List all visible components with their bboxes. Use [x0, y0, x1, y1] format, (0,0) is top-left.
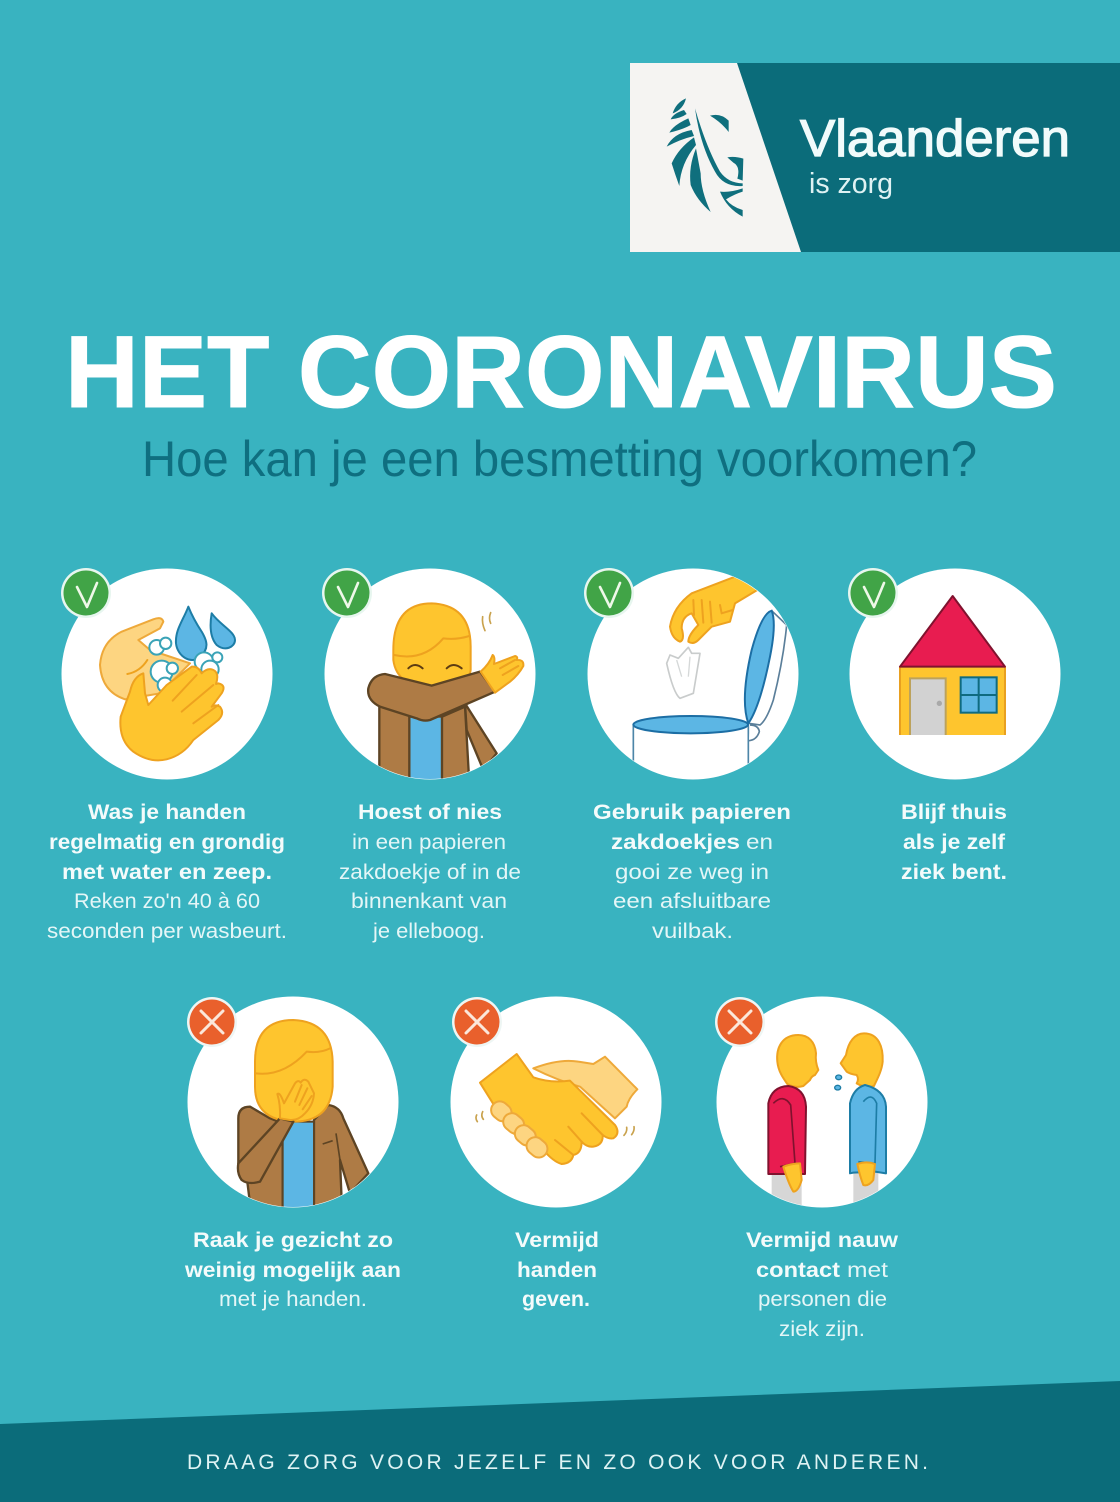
illustration: handshake — [476, 1054, 637, 1164]
panel: paper tissues — [584, 568, 798, 943]
caption — [47, 801, 287, 943]
caption: Gebruik papieren — [593, 801, 791, 824]
illustration: tissue and bin — [633, 577, 787, 787]
panel: stay home — [848, 568, 1060, 884]
caption: in een papieren — [352, 831, 506, 854]
caption: ziek bent. — [901, 861, 1007, 884]
logo tagline: is zorg — [809, 168, 893, 200]
caption: en — [746, 831, 773, 854]
caption: vuilbak. — [652, 920, 733, 943]
title: HET CORONAVIRUS — [65, 315, 1057, 429]
caption: Reken zo'n 40 à 60 — [74, 890, 260, 913]
logo wordmark: Vlaanderen — [800, 110, 1070, 168]
footer banner — [0, 1381, 1120, 1502]
caption: je elleboog. — [372, 920, 485, 943]
circle — [324, 568, 536, 780]
caption: gooi ze weg in — [615, 861, 769, 884]
caption: Hoest of nies — [358, 801, 502, 824]
logo dark banner — [735, 63, 1120, 252]
caption: geven. — [522, 1288, 590, 1311]
badge: check — [584, 568, 634, 618]
caption: regelmatig en grondig — [49, 831, 285, 854]
caption: ziek zijn. — [779, 1318, 865, 1341]
caption: met — [847, 1259, 888, 1282]
panel: cough in elbow — [322, 568, 536, 943]
caption: contact — [756, 1259, 840, 1282]
caption: zakdoekjes — [611, 831, 740, 854]
caption: zakdoekje of in de — [339, 861, 521, 884]
badge: check — [848, 568, 898, 618]
caption — [515, 1229, 599, 1311]
panel: wash hands — [47, 568, 287, 943]
panel: do not touch face — [184, 996, 401, 1311]
caption: met water en zeep. — [62, 861, 272, 884]
caption: Vermijd — [515, 1229, 599, 1252]
icon: Flemish lion — [667, 98, 743, 217]
panel: avoid handshakes — [450, 996, 662, 1311]
logo white panel — [630, 63, 801, 252]
caption — [339, 801, 521, 943]
circle — [850, 568, 1060, 780]
circle — [450, 996, 662, 1208]
badge: cross — [187, 997, 237, 1047]
caption: Vermijd nauw — [746, 1229, 899, 1252]
illustration: hand on face — [238, 1020, 368, 1217]
caption: Raak je gezicht zo — [193, 1229, 393, 1252]
caption — [184, 1229, 401, 1311]
caption — [593, 801, 791, 943]
logo: Vlaanderen is zorg — [630, 63, 1120, 252]
caption: een afsluitbare — [613, 890, 771, 913]
badge: cross — [452, 997, 502, 1047]
caption: binnenkant van — [351, 890, 507, 913]
illustration: two people close together — [768, 1033, 886, 1210]
footer background — [0, 1381, 1120, 1502]
caption: handen — [517, 1259, 597, 1282]
illustration: coughing into elbow — [368, 603, 523, 783]
caption — [746, 1229, 899, 1341]
footer text: DRAAG ZORG VOOR JEZELF EN ZO OOK VOOR ANDEREN. — [187, 1451, 928, 1474]
caption — [901, 801, 1007, 884]
caption: seconden per wasbeurt. — [47, 920, 287, 943]
circle — [62, 568, 272, 780]
circle — [188, 996, 398, 1208]
subtitle: Hoe kan je een besmetting voorkomen? — [142, 431, 977, 487]
caption: als je zelf — [903, 831, 1006, 854]
caption: met je handen. — [219, 1288, 367, 1311]
panel: avoid close contact — [715, 996, 928, 1341]
caption: weinig mogelijk aan — [184, 1259, 401, 1282]
caption: personen die — [758, 1288, 887, 1311]
badge: check — [322, 568, 372, 618]
badge: check — [61, 568, 111, 618]
illustration: washing hands — [100, 607, 235, 760]
illustration: house — [900, 596, 1005, 735]
circle — [716, 996, 928, 1208]
caption: Blijf thuis — [901, 801, 1007, 824]
caption: Was je handen — [88, 801, 246, 824]
circle — [588, 568, 798, 780]
badge: cross — [715, 997, 765, 1047]
